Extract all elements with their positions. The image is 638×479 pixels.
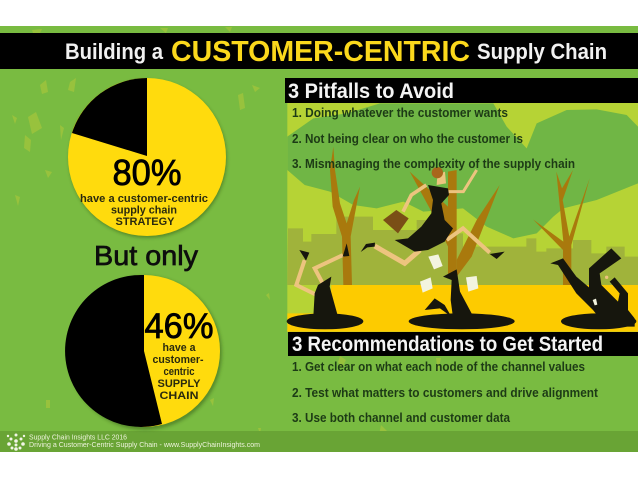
pitfalls list: 1. Doing whatever the customer wants [292,106,508,120]
title bar: CUSTOMER-CENTRIC [171,36,470,68]
pitfalls list [292,106,575,171]
80% label: 80% [112,152,182,193]
heading: 3 pitfalls: 3 Pitfalls to Avoid [288,80,454,103]
pie chart: 46%: have a [162,342,196,354]
footer band [0,431,638,452]
heading: 3 pitfalls [285,78,638,103]
pitfalls list: 2. Not being clear on who the customer is [292,132,523,146]
pie chart: 80%: STRATEGY [116,216,175,228]
title bar [0,33,638,69]
tree trunks [330,147,590,285]
pie chart: 46%: SUPPLY [158,378,201,390]
ground [287,285,638,332]
46% label: 46% [144,307,214,346]
illustration: falling business people [287,102,638,332]
title bar: Supply Chain [477,39,607,64]
pie chart: 80%: have a customer-centric [80,193,208,205]
pie chart: 46%: customer- [152,354,204,366]
but only text: But only [94,240,198,271]
confetti decoration [12,27,441,447]
pie chart: 46% [65,275,222,430]
footer text: Driving a Customer-Centric Supply Chain - www.SupplyChainInsights.com [29,440,260,449]
footer text: Supply Chain Insights LLC 2016 [29,432,127,442]
footer text [29,432,260,449]
papers [420,254,478,293]
tree foliage [287,103,638,238]
pitfalls list: 3. Mismanaging the complexity of the supply chain [292,157,575,171]
icon: logo [7,434,25,451]
falling woman legs [296,243,349,295]
illustration backdrop [287,102,638,332]
recommendations list: 3. Use both channel and customer data [292,411,511,425]
pie chart: 46%: centric [164,366,194,378]
rim of ground [287,329,638,332]
pie chart: 80% [68,78,227,238]
holes and falling figures [287,248,636,329]
recommendations list [292,360,599,425]
skyline [287,217,638,285]
title text: Building a [65,39,164,64]
pie chart: 80%: supply chain [111,204,177,216]
pie chart: 46%: CHAIN [160,390,199,402]
recommendations list: 1. Get clear on what each node of the channel values [292,360,585,374]
heading: 3 recommendations: 3 Recommendations to Get Started [292,333,603,356]
running woman [361,167,505,263]
recommendations list: 2. Test what matters to customers and drive alignment [292,386,599,400]
